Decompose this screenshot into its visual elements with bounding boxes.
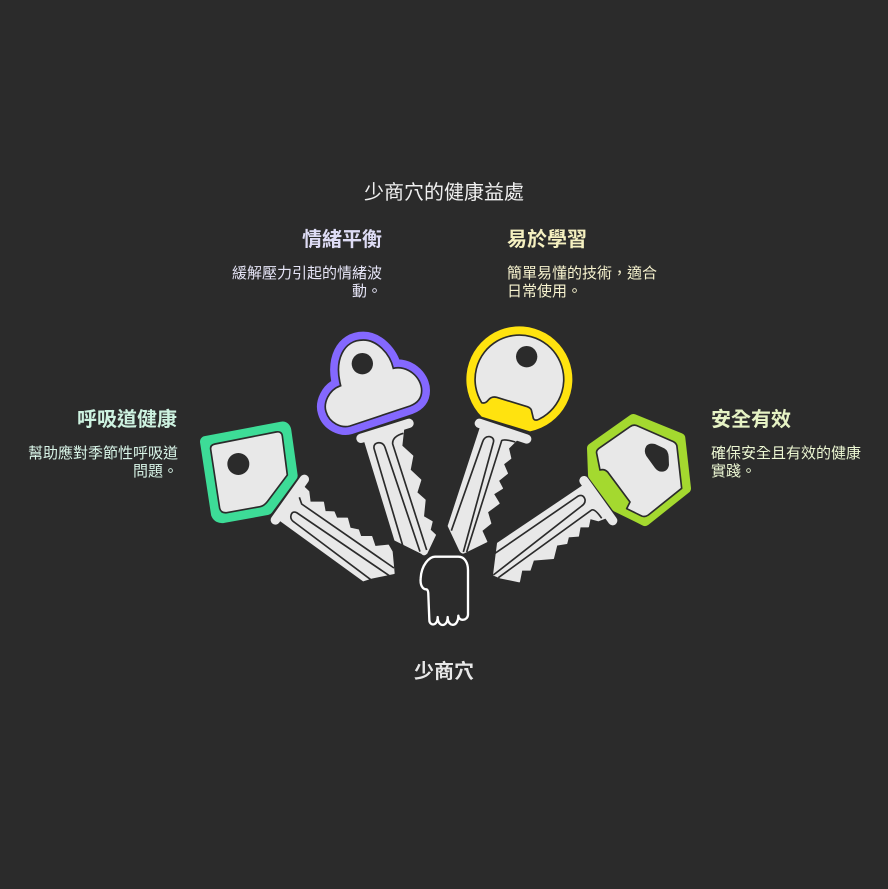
yellow key head	[466, 326, 572, 431]
text: easy to learn: 簡單易懂的技術，適合日常使用。	[507, 265, 657, 300]
title: 少商穴的健康益處	[364, 182, 524, 204]
key: purple, emotional balance	[325, 340, 435, 555]
lime key inner plate	[597, 425, 682, 516]
purple key grooves	[374, 433, 427, 552]
heading: safe and effective: 安全有效	[711, 409, 791, 431]
lime key head	[592, 419, 686, 521]
purple key blade	[363, 425, 435, 555]
green key hole	[227, 453, 249, 475]
yellow key blade	[448, 424, 520, 553]
purple key shoulder	[361, 423, 409, 438]
key: green, respiratory health	[206, 427, 394, 581]
key: yellow, easy to learn	[448, 326, 572, 553]
purple key inner plate	[325, 340, 422, 427]
purple key head	[325, 340, 422, 427]
yellow key grooves	[451, 437, 515, 552]
icon: hand	[421, 557, 468, 625]
yellow key hole	[516, 346, 537, 367]
text: safe and effective: 確保安全且有效的健康實踐。	[711, 445, 861, 480]
text: respiratory health: 幫助應對季節性呼吸道問題。	[28, 445, 178, 480]
lime key grooves	[493, 495, 602, 578]
green key blade	[277, 485, 394, 581]
green key grooves	[291, 497, 394, 580]
yellow key shoulder	[479, 423, 527, 439]
green key shoulder	[275, 479, 304, 520]
purple key hole	[352, 353, 373, 374]
yellow key inner plate	[475, 335, 564, 420]
green key head	[206, 427, 292, 517]
heading: easy to learn: 易於學習	[507, 229, 587, 251]
center label: 少商穴	[414, 661, 474, 683]
heading: respiratory health: 呼吸道健康	[77, 409, 177, 431]
text: emotional balance: 緩解壓力引起的情緒波動。	[232, 265, 382, 300]
green key inner plate	[211, 432, 287, 513]
heading: emotional balance: 情緒平衡	[302, 229, 382, 251]
lime key blade	[494, 483, 609, 582]
lime key shoulder	[584, 481, 613, 521]
lime key hole	[645, 444, 669, 472]
key: lime, safe and effective	[493, 419, 686, 582]
